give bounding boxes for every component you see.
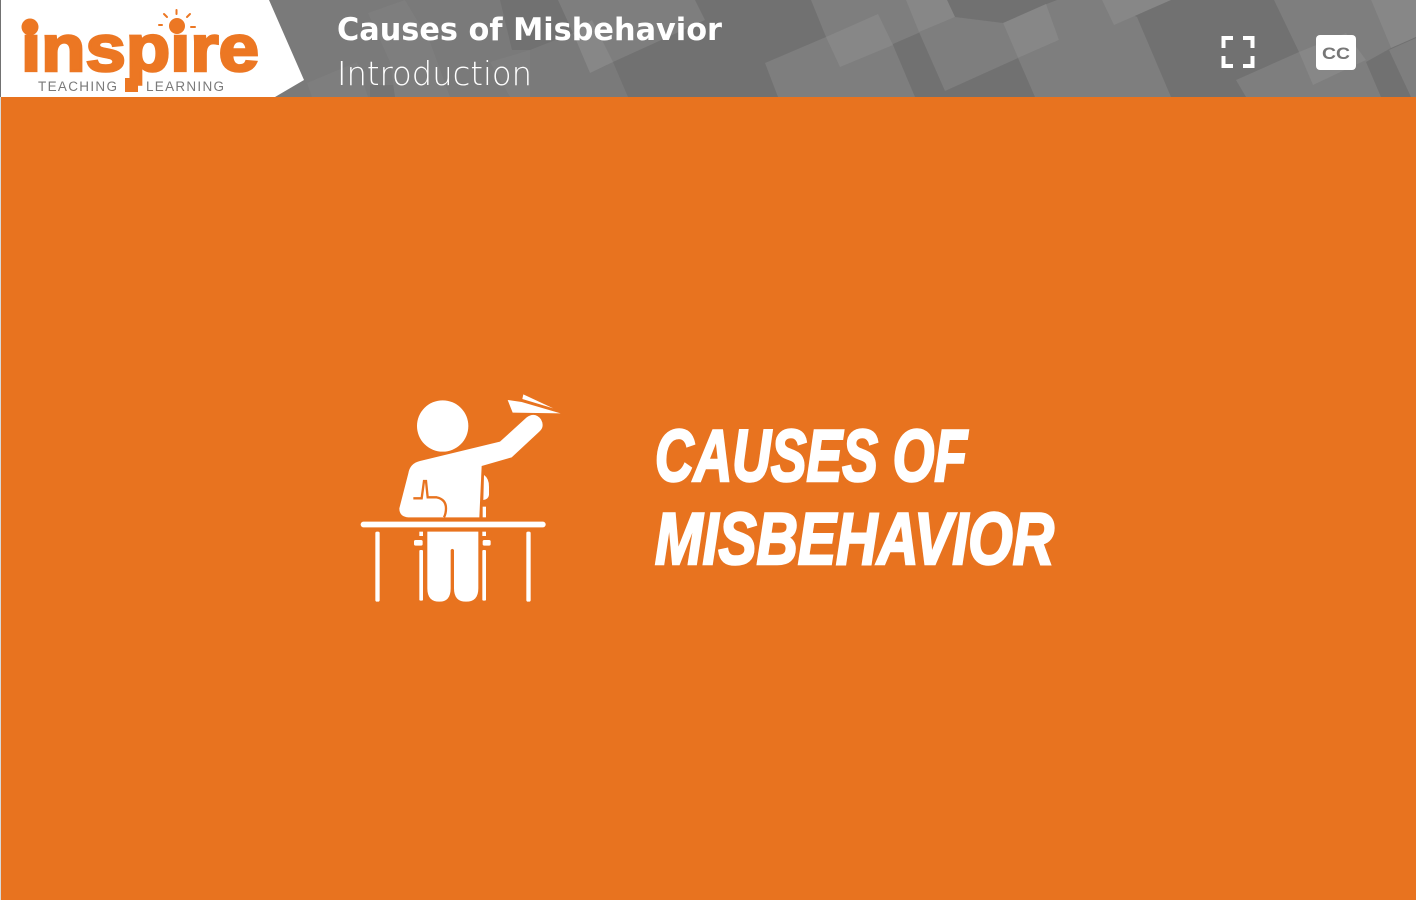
logo tagline left: TEACHING: [38, 79, 117, 94]
logo p descender: [125, 78, 138, 92]
logo dots and sun: [20, 10, 195, 36]
head: [417, 400, 468, 452]
icon: fullscreen: [1224, 38, 1252, 66]
paper plane: [508, 394, 561, 413]
header title: Causes of Misbehavior: [337, 12, 723, 48]
chair legs: [414, 532, 491, 601]
main heading: [655, 416, 1054, 580]
icon: student throwing paper plane at desk: [361, 394, 561, 602]
chair back: [483, 475, 489, 517]
header subtitle: Introduction: [337, 54, 532, 93]
desk top: [361, 522, 546, 527]
student legs: [427, 532, 478, 602]
header banner: [0, 0, 1416, 97]
logo plate: [1, 0, 304, 97]
icon: closed captions: [1316, 35, 1356, 70]
desk legs: [375, 532, 531, 602]
heading line 1: CAUSES OF: [655, 416, 969, 497]
logo wordmark: inspire: [21, 11, 259, 85]
torso and raised arm: [399, 415, 543, 517]
icon: closed captions: CC: [1322, 44, 1350, 63]
logo tagline right: LEARNING: [146, 79, 224, 94]
heading line 2: MISBEHAVIOR: [655, 499, 1054, 580]
